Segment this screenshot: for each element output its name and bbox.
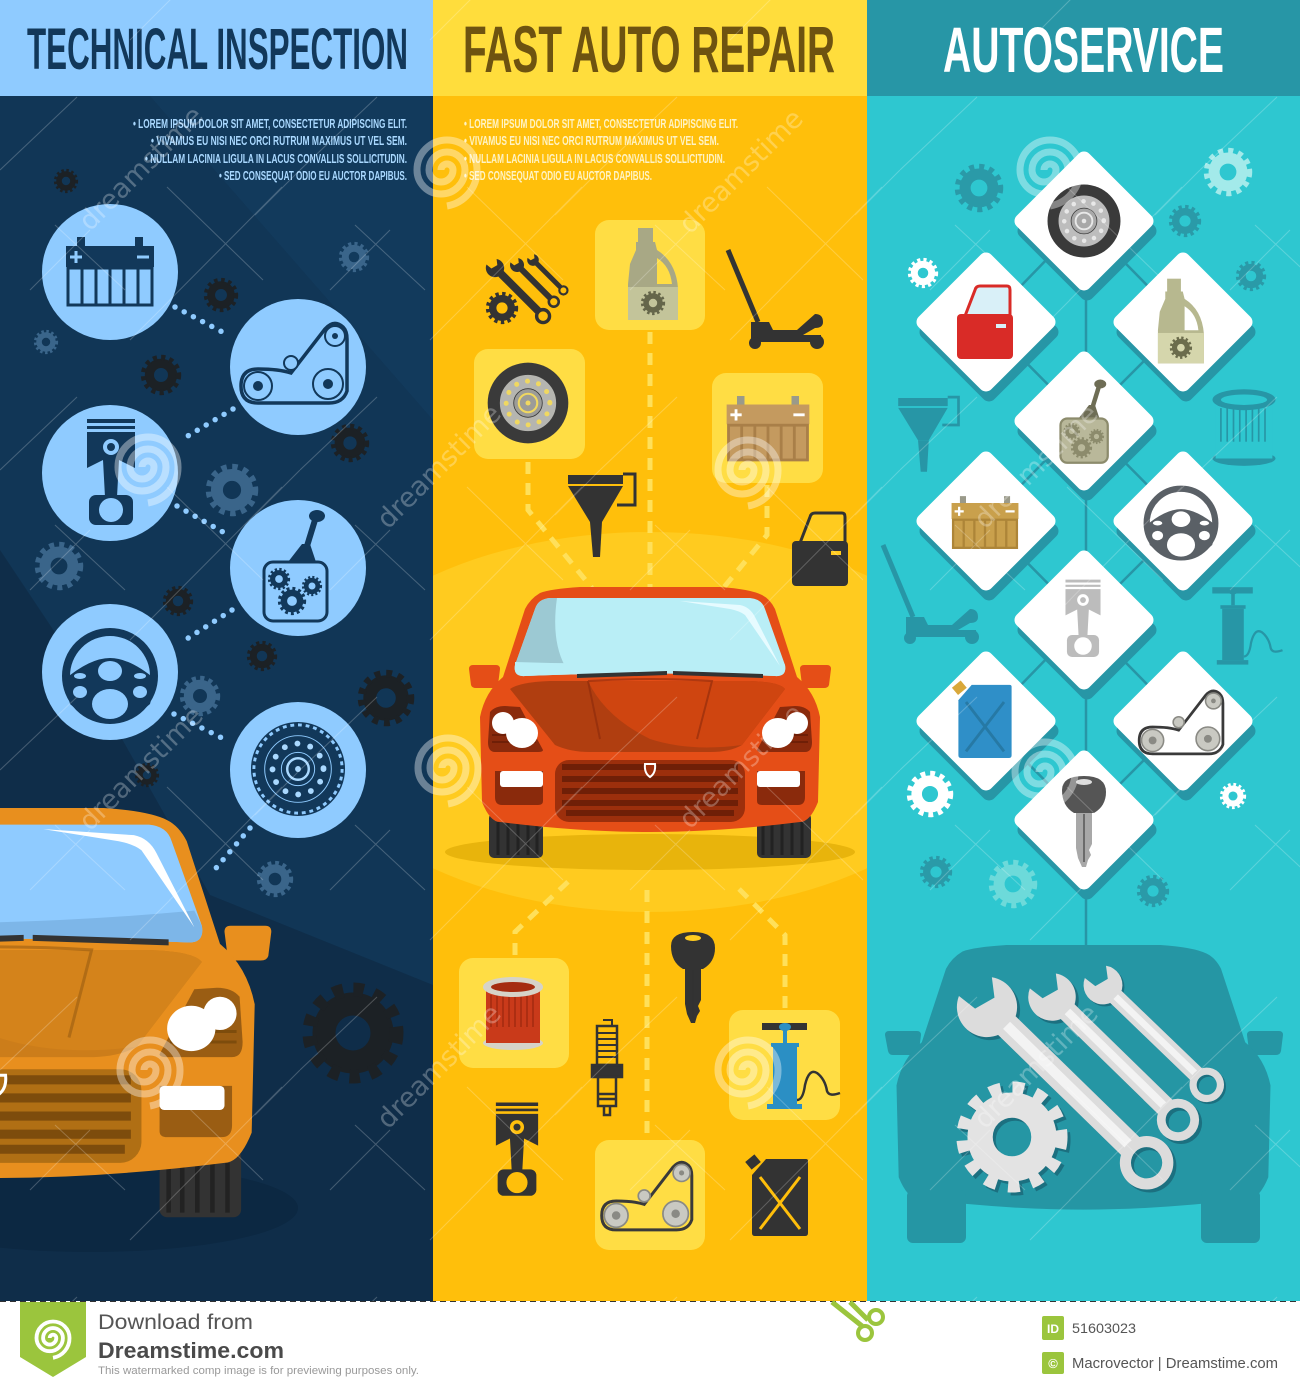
icon: wrenches <box>480 251 572 330</box>
title: fast auto repair: FAST AUTO REPAIR <box>463 12 835 86</box>
text: author credit: Macrovector | Dreamstime.com <box>1072 1355 1278 1372</box>
white diamonds <box>924 159 1245 882</box>
icon: oil <box>1158 279 1204 363</box>
icon: piston <box>496 1102 538 1196</box>
dotted connectors <box>174 307 250 874</box>
icon: jack <box>728 250 824 349</box>
watermark overlay: dreamstime <box>673 103 810 240</box>
icon: wheel <box>1048 185 1120 257</box>
icon: key <box>671 932 715 1023</box>
blue gears <box>36 244 367 895</box>
text block: lorem bullets: • SED CONSEQUAT ODIO EU AUCTOR DAPIBUS. <box>464 169 652 183</box>
icon: wheel circle <box>230 702 366 838</box>
orange car <box>0 808 271 1217</box>
car shadow <box>445 834 855 870</box>
watermark overlay: dreamstime <box>968 398 1105 535</box>
gear <box>964 1089 1063 1188</box>
badge: id: ID <box>1047 1322 1059 1336</box>
text block: lorem bullets: • LOREM IPSUM DOLOR SIT AMET, CONSECTETUR ADIPISCING ELIT. <box>133 117 407 131</box>
icon: belt circle <box>230 299 366 435</box>
watermark overlay: dreamstime <box>371 998 508 1135</box>
text: download from: Download from <box>98 1311 253 1334</box>
icon tile: wheel <box>474 349 585 459</box>
icon: canister <box>745 1154 808 1236</box>
red car <box>469 587 831 858</box>
icon: piston <box>1065 580 1101 657</box>
silhouette: filter <box>1212 389 1276 466</box>
watermark overlay: dreamstime <box>73 100 210 237</box>
watermark overlay: dreamstime <box>371 398 508 535</box>
icon: gearshift circle <box>230 500 366 636</box>
header band: autoservice <box>867 0 1300 96</box>
icon: piston circle <box>42 405 178 541</box>
diamond shadows <box>927 169 1248 892</box>
text block: lorem bullets: • VIVAMUS EU NISI NEC ORCI RUTRUM MAXIMUS UT VEL SEM. <box>464 134 719 148</box>
teal gears <box>922 167 1264 905</box>
dark gears <box>56 171 410 1076</box>
text block: lorem bullets <box>464 117 738 183</box>
icon: scissors <box>832 1302 883 1340</box>
white gears <box>910 260 1244 814</box>
text block: lorem bullets: • VIVAMUS EU NISI NEC ORCI RUTRUM MAXIMUS UT VEL SEM. <box>151 134 407 148</box>
icon: canister <box>952 680 1012 758</box>
text block: lorem bullets: • NULLAM LACINIA LIGULA IN LACUS CONVALLIS SOLLICITUDIN. <box>464 152 725 166</box>
icon tile: belt <box>595 1140 705 1250</box>
panel: fast auto repair <box>433 0 867 1301</box>
car silhouette <box>885 945 1283 1243</box>
text block: lorem bullets: • SED CONSEQUAT ODIO EU AUCTOR DAPIBUS. <box>219 169 407 183</box>
panel: autoservice <box>867 0 1300 1301</box>
watermark overlay: dreamstime <box>968 998 1105 1135</box>
title: technical inspection: TECHNICAL INSPECTION <box>27 17 408 82</box>
light gears <box>992 151 1249 905</box>
tree connectors <box>986 221 1183 950</box>
wrench: small <box>1072 955 1237 1116</box>
icon tile: battery <box>712 373 823 483</box>
icon tile: pump <box>729 1010 840 1120</box>
text block: lorem bullets <box>133 117 407 183</box>
silhouette: pump <box>1212 587 1282 665</box>
text: preview note: This watermarked comp image is for previewing purposes only. <box>98 1365 419 1377</box>
panel: technical inspection <box>0 0 433 1301</box>
text: image id: 51603023 <box>1072 1320 1136 1336</box>
icon tile: oil <box>595 220 705 330</box>
header band: fast auto repair <box>433 0 867 96</box>
icon: battery <box>952 496 1018 548</box>
text block: lorem bullets: • NULLAM LACINIA LIGULA IN LACUS CONVALLIS SOLLICITUDIN. <box>145 152 407 166</box>
text: dreamstime.com: Dreamstime.com <box>98 1338 284 1363</box>
wrench: large <box>939 960 1193 1211</box>
header band: technical inspection <box>0 0 433 96</box>
icon: door <box>792 513 848 586</box>
wrench: medium <box>1014 960 1216 1159</box>
car shadow <box>0 1164 298 1252</box>
badge: copyright: © <box>1048 1356 1058 1371</box>
watermark overlay: dreamstime <box>673 698 810 835</box>
icon: funnel <box>568 474 635 557</box>
icon: spark plug <box>592 1020 622 1115</box>
footer <box>0 1301 1300 1390</box>
text block: lorem bullets: • LOREM IPSUM DOLOR SIT AMET, CONSECTETUR ADIPISCING ELIT. <box>464 117 738 131</box>
badge: id <box>1042 1316 1064 1340</box>
silhouette: funnel <box>898 397 958 472</box>
icon: belt <box>1139 691 1223 754</box>
icon: battery circle <box>42 204 178 340</box>
badge: dreamstime <box>20 1302 86 1377</box>
icon: key <box>1062 776 1106 867</box>
watermark overlay: dreamstime <box>73 700 210 837</box>
icon: gearshift <box>1060 380 1108 463</box>
silhouette: jack <box>883 545 979 644</box>
badge: copyright <box>1042 1352 1064 1374</box>
icon: steering wheel circle <box>42 604 178 740</box>
icon: steering wheel <box>1145 489 1217 559</box>
dashed connectors <box>515 332 785 1138</box>
icon tile: filter <box>459 958 569 1068</box>
icon: door <box>957 286 1013 359</box>
